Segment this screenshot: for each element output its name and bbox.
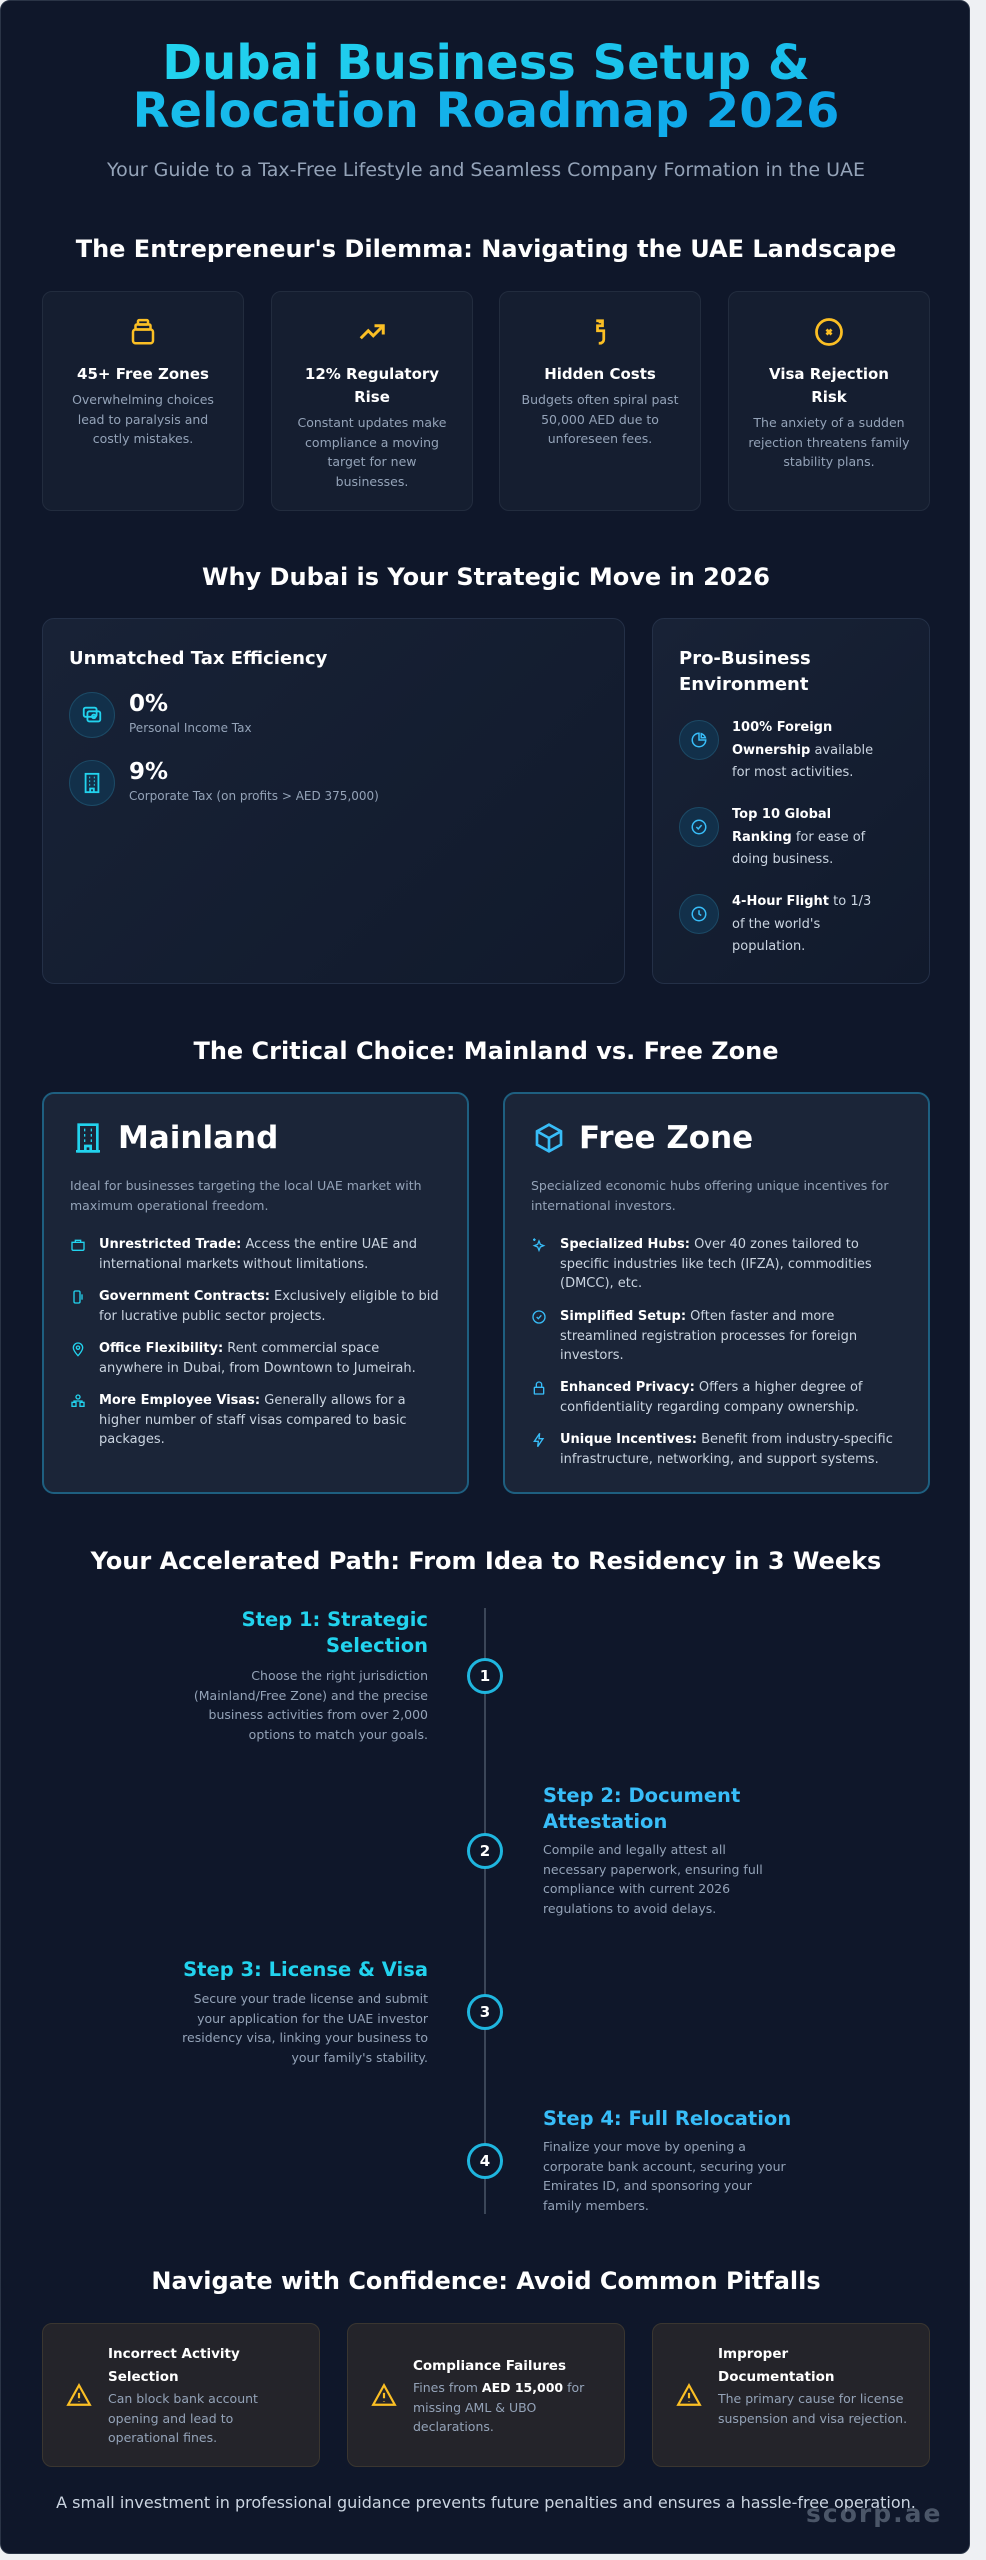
step 4: Step 4: Full Relocation xyxy=(543,2107,791,2130)
icon: trend xyxy=(360,324,385,340)
icon: x circle xyxy=(815,318,843,346)
card: regulatory: 12% Regulatory Rise xyxy=(305,365,439,406)
step 2: Attestation xyxy=(543,1810,667,1833)
node 3 xyxy=(467,1994,503,2030)
watermark: scorp.ae xyxy=(806,2499,942,2528)
panel: mainland xyxy=(42,1092,469,1494)
item: ownership: 100% Foreign Ownership available for most activities. xyxy=(732,720,873,780)
icon: warning xyxy=(371,2383,397,2406)
heading: critical choice: The Critical Choice: Mainland vs. Free Zone xyxy=(193,1037,779,1065)
step 1: Selection xyxy=(326,1634,428,1657)
item: 0%: Personal Income Tax xyxy=(129,721,252,735)
item: 9%: 9% xyxy=(129,759,168,785)
card: hidden costs xyxy=(499,291,701,511)
step 3: Secure your trade license and submit your application for the UAE investor residency visa, linking your business to your family's stability. xyxy=(182,1991,428,2064)
pitfall 2 xyxy=(347,2323,625,2467)
item: contracts: Government Contracts: Exclusively eligible to bid for lucrative public sector projects. xyxy=(99,1289,439,1324)
mainland header: Mainland xyxy=(118,1120,278,1156)
pitfall 2: Fines from AED 15,000 for missing AML & UBO declarations. xyxy=(413,2380,584,2434)
footer note: A small investment in professional guidance prevents future penalties and ensures a hassle-free operation. xyxy=(56,2493,916,2512)
heading: pitfalls: Navigate with Confidence: Avoid Common Pitfalls xyxy=(151,2267,821,2295)
node 2 xyxy=(467,1833,503,1869)
title: Relocation Roadmap 2026 xyxy=(133,83,839,139)
item: flight: 4-Hour Flight to 1/3 of the world's population. xyxy=(732,894,871,954)
heading: why dubai: Why Dubai is Your Strategic Move in 2026 xyxy=(202,563,770,591)
item: office: Office Flexibility: Rent commercial space anywhere in Dubai, from Downtown to Jumeirah. xyxy=(99,1341,416,1376)
step 2: Step 2: Document xyxy=(543,1784,740,1807)
title xyxy=(133,35,839,139)
card: visa: Visa Rejection Risk xyxy=(769,365,889,406)
panel: pro-business xyxy=(652,618,930,984)
item: ranking: Top 10 Global Ranking for ease of doing business. xyxy=(732,807,865,867)
icon: stack xyxy=(132,318,154,344)
mainland desc: Ideal for businesses targeting the local UAE market with maximum operational freedom. xyxy=(70,1178,422,1212)
node 1 xyxy=(467,1658,503,1694)
item: 0%: 0% xyxy=(129,691,168,717)
step 2: Compile and legally attest all necessary paperwork, ensuring full compliance with current 2026 regulations to avoid delays. xyxy=(543,1842,763,1916)
free zone header: Free Zone xyxy=(579,1120,753,1156)
timeline xyxy=(484,1608,486,2214)
card: hidden costs: Budgets often spiral past 50,000 AED due to unforeseen fees. xyxy=(522,392,678,446)
card: visa xyxy=(728,291,930,511)
step 1: Step 1: Strategic xyxy=(242,1608,428,1631)
step 4 xyxy=(543,2107,791,2212)
step 1 xyxy=(194,1608,428,1742)
heading: dilemma: The Entrepreneur's Dilemma: Navigating the UAE Landscape xyxy=(76,235,896,263)
step 4: Finalize your move by opening a corporate bank account, securing your Emirates ID, and sponsoring your family members. xyxy=(543,2139,786,2212)
pitfall 1 xyxy=(42,2323,320,2467)
step 3 xyxy=(182,1958,428,2064)
panel: tax xyxy=(42,618,625,984)
pitfall 2: Compliance Failures xyxy=(413,2358,566,2374)
panel: free zone xyxy=(503,1092,930,1494)
node 3: 3 xyxy=(480,2003,490,2021)
item: 9%: Corporate Tax (on profits > AED 375,000) xyxy=(129,789,379,803)
pitfall 1: Can block bank account opening and lead to operational fines. xyxy=(108,2391,258,2445)
card: free zones xyxy=(42,291,244,511)
node 1: 1 xyxy=(480,1667,490,1685)
pitfall 3: Improper Documentation xyxy=(718,2346,834,2385)
tax title: Unmatched Tax Efficiency xyxy=(69,648,327,669)
node 2: 2 xyxy=(480,1842,490,1860)
item: hubs: Specialized Hubs: Over 40 zones tailored to specific industries like tech (IFZA), commodities (DMCC), etc. xyxy=(560,1237,872,1291)
step 3: Step 3: License & Visa xyxy=(183,1958,428,1981)
subtitle: Your Guide to a Tax-Free Lifestyle and Seamless Company Formation in the UAE xyxy=(107,159,865,181)
icon: warning xyxy=(66,2383,92,2406)
card: regulatory: Constant updates make compliance a moving target for new businesses. xyxy=(297,415,447,488)
title: Dubai Business Setup & xyxy=(162,35,810,91)
pro title xyxy=(679,648,811,695)
free zone desc: Specialized economic hubs offering unique incentives for international investors. xyxy=(531,1178,888,1212)
node 4: 4 xyxy=(480,2152,490,2170)
item: 9% xyxy=(69,759,379,806)
step 2 xyxy=(543,1784,763,1916)
card: visa: The anxiety of a sudden rejection threatens family stability plans. xyxy=(748,415,910,469)
card: regulatory xyxy=(271,291,473,511)
card: free zones: 45+ Free Zones xyxy=(77,365,209,383)
card: hidden costs: Hidden Costs xyxy=(544,365,656,383)
pitfall 3: The primary cause for license suspension and visa rejection. xyxy=(718,2391,907,2426)
item: visas: More Employee Visas: Generally allows for a higher number of staff visas compared to basic packages. xyxy=(99,1393,407,1447)
icon: warning xyxy=(676,2383,702,2406)
card: free zones: Overwhelming choices lead to paralysis and costly mistakes. xyxy=(72,392,214,446)
pitfall 1: Incorrect Activity Selection xyxy=(108,2346,240,2385)
item: trade: Unrestricted Trade: Access the entire UAE and international markets without limitations. xyxy=(99,1237,417,1272)
icon: money xyxy=(596,319,606,345)
node 4 xyxy=(467,2143,503,2179)
item: privacy: Enhanced Privacy: Offers a higher degree of confidentiality regarding company ownership. xyxy=(560,1380,863,1414)
pro title: Environment xyxy=(679,674,808,695)
heading: path: Your Accelerated Path: From Idea to Residency in 3 Weeks xyxy=(91,1547,881,1575)
item: setup: Simplified Setup: Often faster and more streamlined registration processes for foreign investors. xyxy=(560,1309,857,1363)
step 1: Choose the right jurisdiction (Mainland/Free Zone) and the precise business activities from over 2,000 options to match your goals. xyxy=(194,1668,428,1742)
pro title: Pro-Business xyxy=(679,648,811,669)
item: 0% xyxy=(69,691,252,738)
pitfall 3 xyxy=(652,2323,930,2467)
item: incentives: Unique Incentives: Benefit from industry-specific infrastructure, networking, and support systems. xyxy=(560,1432,893,1466)
